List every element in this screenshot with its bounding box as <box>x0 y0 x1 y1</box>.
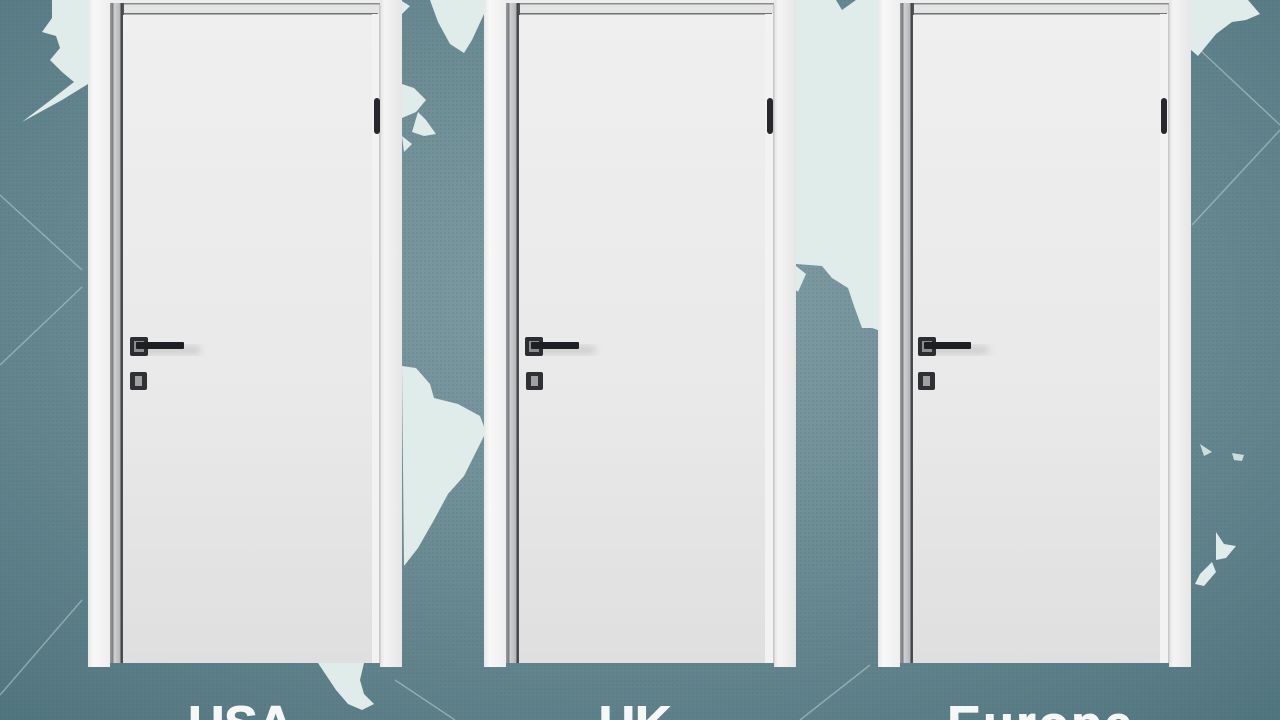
map: Alaska <box>22 0 96 122</box>
door: USA <box>88 0 402 667</box>
handle <box>918 337 988 356</box>
door: Europe <box>878 0 1191 667</box>
map: South America <box>402 366 486 566</box>
hinge <box>767 98 773 134</box>
map: Africa and Asia <box>796 0 878 330</box>
door frame <box>88 0 402 667</box>
map: Canadian top corner <box>400 0 410 14</box>
map: Indonesian islands <box>1200 444 1244 461</box>
lock <box>526 372 543 390</box>
handle <box>525 337 595 356</box>
map: New Zealand <box>1195 532 1236 586</box>
door panel <box>913 15 1160 663</box>
lock <box>130 372 147 390</box>
map: Greenland <box>430 0 485 53</box>
hinge <box>374 98 380 134</box>
map: Northeast Asia <box>1191 0 1260 56</box>
door frame <box>484 0 796 667</box>
door: UK <box>484 0 796 667</box>
hinge <box>1161 98 1167 134</box>
map: Central America <box>318 663 374 710</box>
map: Caribbean islands <box>402 84 436 152</box>
handle <box>130 337 200 356</box>
door panel <box>123 15 372 663</box>
door frame <box>878 0 1191 667</box>
door panel <box>519 15 765 663</box>
map: small peninsula <box>796 266 806 292</box>
lock <box>918 372 935 390</box>
